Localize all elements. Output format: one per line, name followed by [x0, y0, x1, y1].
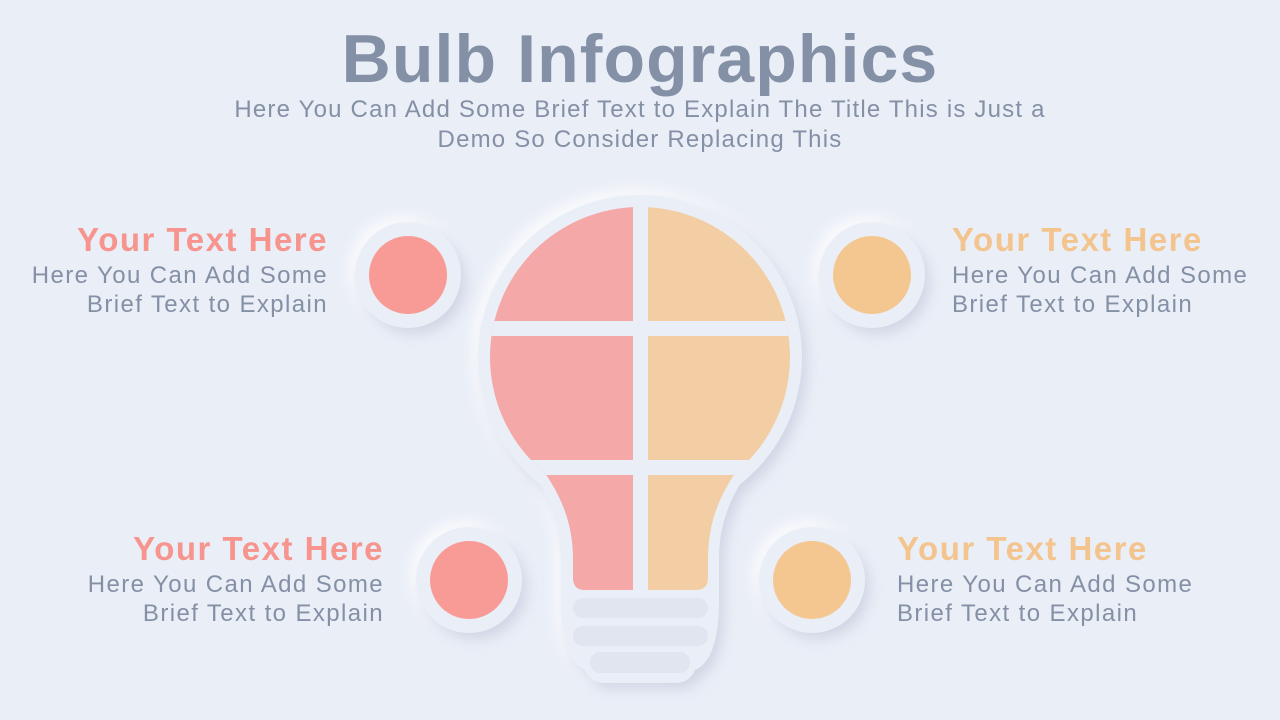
text block: top left: [32, 221, 328, 318]
text block: top right: [952, 221, 1248, 318]
text block: bottom left: [88, 530, 384, 627]
text block: top right: Your Text Here: [952, 221, 1203, 258]
text block: bottom left: Your Text Here: [133, 530, 384, 567]
text block: top left: Brief Text to Explain: [87, 291, 328, 318]
bulb graphic: [474, 190, 810, 692]
text block: top right: Here You Can Add Some: [952, 262, 1248, 289]
text block: bottom right: [897, 530, 1193, 627]
text block: bottom left: Brief Text to Explain: [143, 600, 384, 627]
text block: bottom right: Here You Can Add Some: [897, 571, 1193, 598]
text block: top left: Here You Can Add Some: [32, 262, 328, 289]
text block: top left: Your Text Here: [77, 221, 328, 258]
text block: bottom right: Brief Text to Explain: [897, 600, 1138, 627]
subtitle: [234, 96, 1046, 153]
text block: bottom left: Here You Can Add Some: [88, 571, 384, 598]
title: Bulb Infographics: [342, 21, 938, 97]
subtitle: Demo So Consider Replacing This: [438, 126, 842, 153]
text block: top right: Brief Text to Explain: [952, 291, 1193, 318]
text block: bottom right: Your Text Here: [897, 530, 1148, 567]
subtitle: Here You Can Add Some Brief Text to Explain The Title This is Just a: [234, 96, 1046, 123]
